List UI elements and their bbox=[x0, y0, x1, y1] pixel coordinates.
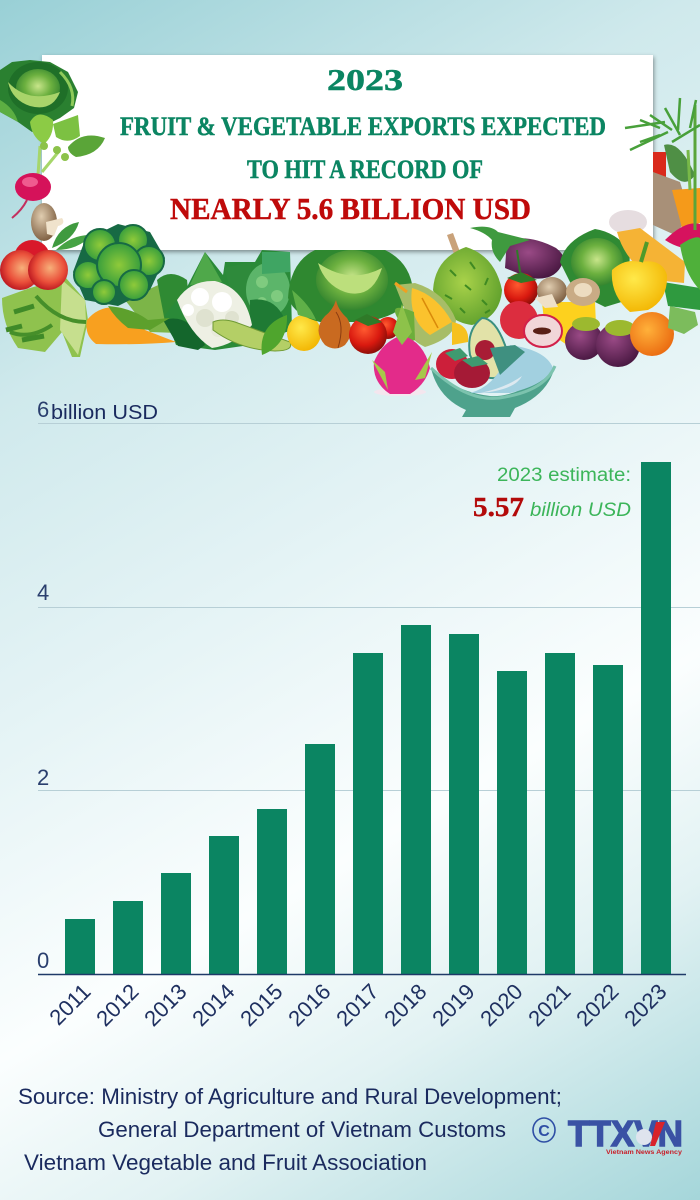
icon: cabbage right bbox=[560, 229, 630, 307]
source text bbox=[18, 1084, 562, 1175]
icon: radish bbox=[12, 173, 51, 218]
callout: 2023 estimate bbox=[473, 465, 631, 522]
icon: broccoli stem bbox=[125, 282, 178, 333]
icon: tomato with stem bbox=[504, 250, 538, 307]
icon: yellow pepper bbox=[612, 242, 667, 312]
icon: mangosteens bbox=[565, 317, 640, 367]
icon: durian whole bbox=[433, 247, 502, 325]
y axis labels: 0 bbox=[37, 948, 49, 973]
icon: cabbage center bbox=[288, 250, 413, 322]
icon: lettuce bbox=[2, 278, 88, 357]
x axis year labels: 2012 bbox=[91, 979, 144, 1031]
callout: 2023 estimate: billion USD bbox=[530, 500, 631, 521]
y axis labels: 2 bbox=[37, 765, 49, 790]
x axis year labels: 2023 bbox=[619, 979, 672, 1031]
y axis labels: 6 bbox=[37, 397, 49, 422]
y axis labels: 4 bbox=[37, 580, 49, 605]
x axis year labels: 2020 bbox=[475, 979, 528, 1031]
x axis year labels: 2021 bbox=[523, 979, 576, 1031]
icon: onion bbox=[318, 300, 351, 348]
icon: dark greens bbox=[157, 250, 292, 350]
icon: radish leaves bbox=[30, 114, 105, 175]
icon: dragon fruit bbox=[372, 304, 432, 396]
logo globe and red mark bbox=[636, 1122, 665, 1146]
icon: onion skin bbox=[609, 210, 647, 234]
icon: carrot bbox=[86, 307, 176, 344]
x axis year labels: 2011 bbox=[44, 979, 96, 1030]
chart grid lines bbox=[38, 424, 700, 790]
icon: cauliflower bbox=[177, 281, 252, 348]
x axis year labels: 2018 bbox=[379, 979, 432, 1031]
icon: lemon leaf bbox=[262, 315, 287, 355]
title line 1: FRUIT & VEGETABLE EXPORTS EXPECTED bbox=[120, 112, 606, 141]
source text: Source: Ministry of Agriculture and Rural Development; bbox=[18, 1084, 562, 1109]
icon: durian open bbox=[395, 283, 468, 347]
copyright mark bbox=[533, 1118, 555, 1142]
icon: lemon bbox=[287, 315, 321, 351]
x axis year labels: 2017 bbox=[331, 979, 384, 1031]
callout: 2023 estimate: 5.57 bbox=[473, 492, 524, 522]
title line 2: TO HIT A RECORD OF bbox=[247, 155, 483, 184]
title year: 2023 bbox=[327, 62, 403, 97]
bar chart bars bbox=[65, 462, 671, 974]
icon: cabbage top left bbox=[0, 60, 78, 132]
icon: lychee whole bbox=[500, 301, 538, 339]
title panel bbox=[42, 55, 653, 250]
callout: 2023 estimate: 2023 estimate: bbox=[497, 465, 631, 486]
icon: strawberries bbox=[436, 348, 490, 388]
icon: lychee open bbox=[524, 315, 562, 347]
icon: tomatoes center bbox=[349, 314, 399, 354]
x axis year labels: 2013 bbox=[139, 979, 192, 1031]
icon: broccoli bbox=[73, 224, 165, 306]
vegetables: left and bottom band bbox=[0, 60, 321, 357]
source text: General Department of Vietnam Customs bbox=[98, 1117, 506, 1142]
y axis labels bbox=[37, 397, 49, 973]
x axis year labels: 2022 bbox=[571, 979, 624, 1031]
chart bbox=[37, 397, 700, 1031]
icon: mushroom left bbox=[31, 203, 63, 241]
icon: peaches bbox=[0, 240, 68, 290]
axis unit: billion USD bbox=[51, 402, 158, 424]
x axis year labels: 2016 bbox=[283, 979, 336, 1031]
copyright mark: C bbox=[538, 1123, 550, 1140]
logo: TTXVN: Vietnam News Agency bbox=[606, 1149, 682, 1156]
icon: right greens and vegetables bbox=[625, 98, 700, 250]
icon: carrot leaves bbox=[108, 306, 170, 330]
title highlight: NEARLY 5.6 BILLION USD bbox=[170, 191, 531, 226]
x axis year labels: 2015 bbox=[235, 979, 288, 1031]
icon: small leaves bbox=[52, 222, 92, 250]
icon: corn bbox=[617, 228, 685, 283]
x axis year labels bbox=[44, 979, 672, 1031]
logo: TTXVN: TTXVN bbox=[568, 1113, 683, 1154]
icon: yellow fruit behind lychee bbox=[542, 302, 596, 347]
icon: bowl bbox=[431, 345, 555, 417]
icon: durian stem bbox=[447, 233, 460, 254]
icon: eggplant bbox=[470, 227, 564, 279]
icon: cucumber bbox=[213, 320, 291, 351]
source text: Vietnam Vegetable and Fruit Association bbox=[24, 1150, 427, 1175]
icon: mushrooms right bbox=[535, 277, 600, 308]
icon: green leaf right bbox=[680, 237, 700, 290]
x axis year labels: 2014 bbox=[187, 979, 240, 1031]
icon: right green pieces bbox=[663, 282, 700, 334]
icon: avocado bbox=[469, 318, 507, 378]
x axis year labels: 2019 bbox=[427, 979, 480, 1031]
chart baseline bbox=[38, 974, 686, 976]
icon: orange bbox=[630, 312, 674, 356]
